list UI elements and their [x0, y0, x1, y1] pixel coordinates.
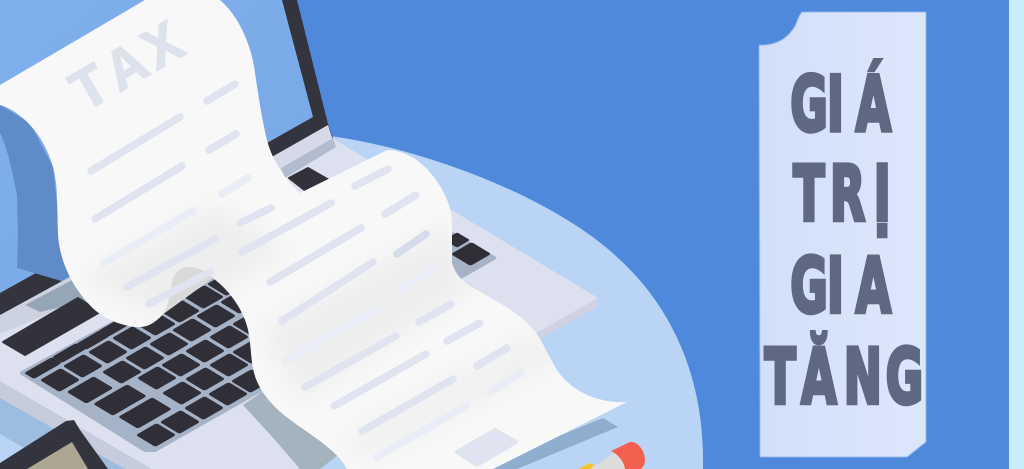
- screen bezel: [267, 0, 333, 158]
- title line 2: TRỊ: [793, 150, 891, 238]
- pencil metal band: [590, 450, 630, 469]
- left bezel: [0, 254, 78, 316]
- receipt paper: [0, 0, 627, 469]
- paper text lines: [91, 84, 521, 457]
- paper shadow on laptop base: [243, 392, 338, 469]
- pencil: [578, 442, 645, 469]
- left hinge strip: [0, 274, 90, 334]
- paper shadow on platform: [478, 418, 618, 469]
- keyboard: [22, 185, 494, 450]
- key caps: [24, 232, 491, 447]
- tablet: [0, 420, 108, 469]
- right edge strip: [1009, 0, 1024, 469]
- title: GIÁ TRỊ GIA TĂNG: [765, 60, 923, 421]
- keyboard tray: [22, 185, 494, 450]
- laptop screen: [0, 0, 333, 316]
- paper total box: [457, 430, 516, 465]
- title line 4: TĂNG: [765, 333, 923, 421]
- shadow beneath laptop: [0, 398, 125, 469]
- pencil yellow body: [578, 463, 600, 469]
- title line 3: GIA: [790, 242, 891, 330]
- TAX heading: TAX: [59, 8, 203, 130]
- tablet screen: [27, 442, 88, 469]
- paper shadow on screen: [0, 105, 75, 285]
- title line 1: GIÁ: [790, 60, 891, 149]
- title panel: [759, 12, 926, 457]
- hinge shadow strip: [281, 138, 336, 178]
- left hinge shadow: [25, 280, 100, 312]
- hinge strip: [270, 125, 333, 173]
- laptop base: [0, 125, 598, 469]
- pencil eraser: [611, 442, 645, 469]
- speaker bar: [3, 298, 100, 355]
- paper fold shading: [114, 221, 460, 380]
- paper curl underside: [162, 267, 213, 315]
- top key: [289, 168, 329, 192]
- light blue ellipse platform: [0, 136, 703, 469]
